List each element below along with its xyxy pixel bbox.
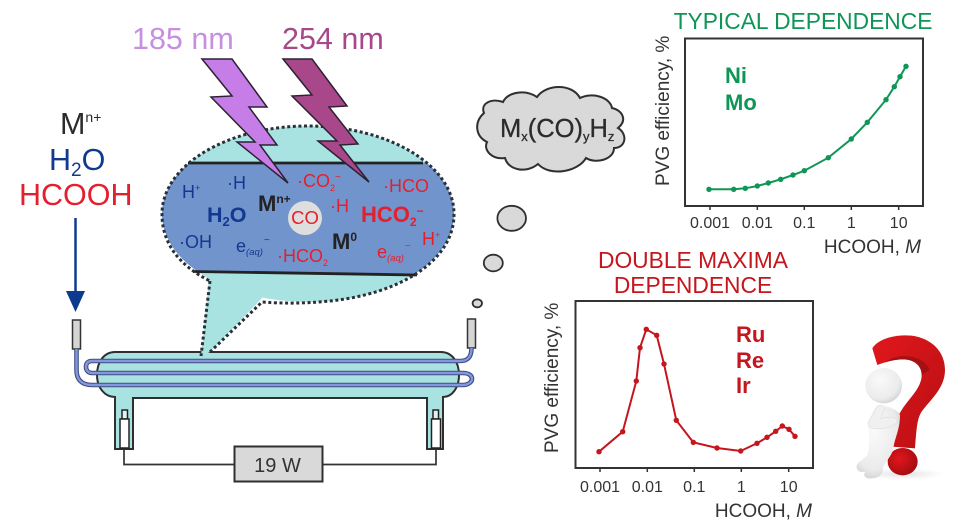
lamp reactor: [72, 319, 476, 482]
metal species: M: [258, 191, 276, 216]
lightning bolt 254 nm: [282, 22, 384, 182]
blue species: +: [195, 183, 200, 193]
red species: (aq): [387, 253, 404, 264]
shadow: [862, 468, 945, 480]
dotted outline: [162, 126, 454, 356]
chart: double maxima dependence: Ru: [736, 322, 765, 347]
reagent labels: HCOOH: [19, 178, 133, 212]
chart: typical dependence: HCOOH, M: [824, 237, 921, 258]
lightning bolt 185 nm: [132, 22, 288, 183]
red species: 2: [410, 215, 417, 229]
red species: 2: [323, 258, 328, 268]
reagent labels: M: [60, 107, 85, 141]
CO circle: [288, 201, 322, 235]
arm: [868, 405, 897, 429]
lightning bolt 185 nm: 185 nm: [132, 22, 234, 56]
question mark dot: [888, 448, 918, 475]
left electrode: [120, 410, 129, 448]
chart: double maxima dependence: PVG efficiency, %: [542, 303, 563, 453]
reagent labels: O: [82, 143, 105, 177]
question mark: [872, 335, 945, 448]
red species: −: [335, 172, 341, 183]
blue species: −: [264, 235, 270, 246]
chart: double maxima dependence: 1: [737, 479, 746, 496]
lamp body: [97, 352, 459, 449]
arrow: sample flow into reactor: [66, 218, 85, 312]
thought bubble large: [497, 206, 526, 231]
red species: −: [417, 204, 424, 218]
chart: typical dependence: Mo: [725, 90, 757, 115]
blue species: O: [230, 203, 246, 227]
chart: typical dependence: [653, 8, 932, 258]
blue species: e: [236, 236, 246, 256]
red species: ·CO: [297, 171, 330, 191]
thought bubble medium: [484, 255, 503, 271]
figure: [857, 406, 900, 478]
chart: typical dependence: TYPICAL DEPENDENCE: [674, 8, 932, 34]
power supply 19 W: 19 W: [254, 455, 301, 477]
thought cloud: y: [583, 129, 590, 144]
thought bubble small: [473, 299, 482, 307]
red species: ·HCO: [383, 176, 429, 196]
chart: double maxima dependence: 0.1: [683, 479, 706, 496]
blue species: H: [207, 203, 223, 227]
chart: double maxima dependence: HCOOH, M: [715, 501, 812, 522]
blue species: H: [182, 182, 195, 202]
callout bubble: [162, 126, 454, 356]
metal species: [258, 191, 357, 254]
right electrode: [432, 410, 440, 448]
chart: typical dependence: 1: [847, 215, 856, 232]
chart: double maxima dependence: 10: [780, 479, 798, 496]
blue species: ·OH: [179, 232, 212, 252]
red species: [277, 171, 440, 268]
red species: e: [377, 242, 387, 262]
chart: double maxima dependence: [542, 247, 813, 522]
chart: typical dependence: PVG efficiency, %: [653, 36, 674, 186]
reagent labels: H: [49, 143, 71, 177]
CO circle: CO: [291, 207, 319, 228]
red species: ·H: [330, 196, 349, 216]
chart: double maxima dependence: DOUBLE MAXIMA: [598, 247, 789, 273]
metal species: 0: [350, 230, 357, 244]
power supply 19 W: [234, 446, 322, 482]
red species: 2: [330, 183, 335, 193]
solution band: [150, 163, 470, 276]
red species: +: [435, 230, 440, 240]
chart: typical dependence: 10: [890, 215, 908, 232]
thought cloud: (CO): [528, 115, 583, 143]
chart: double maxima dependence: DEPENDENCE: [614, 272, 772, 298]
thought cloud: x: [521, 129, 528, 144]
blue species: [179, 173, 270, 258]
coil tube: [76, 348, 472, 385]
wiring: [124, 449, 436, 464]
chart: typical dependence: 0.001: [690, 215, 730, 232]
connector right: [468, 319, 476, 348]
red species: −: [405, 241, 411, 252]
reagent labels: n+: [85, 109, 101, 125]
head: [865, 368, 902, 403]
reagent labels: 2: [71, 160, 82, 181]
blue species: 2: [223, 214, 230, 229]
magnified reactor callout: [150, 126, 470, 356]
thought cloud: H: [589, 115, 608, 143]
blue species: ·H: [227, 173, 246, 193]
thought cloud: z: [608, 129, 614, 144]
icon: thinking figure with question mark: [857, 335, 945, 480]
thought cloud: M: [500, 115, 521, 143]
red species: ·HCO: [277, 246, 323, 266]
chart: double maxima dependence: 0.001: [580, 479, 620, 496]
chart: double maxima dependence: Ir: [736, 373, 751, 398]
red species: H: [422, 229, 435, 249]
lightning bolt 254 nm: 254 nm: [282, 22, 384, 56]
chart: typical dependence: Ni: [725, 63, 747, 88]
chart: double maxima dependence: 0.01: [632, 479, 663, 496]
metal species: n+: [276, 192, 291, 206]
connector left: [72, 320, 80, 349]
chart: typical dependence: 0.1: [793, 215, 816, 232]
chart: double maxima dependence: Re: [736, 348, 764, 373]
metal species: M: [332, 229, 350, 254]
reagent labels: [19, 107, 133, 212]
thought cloud: [477, 87, 624, 172]
red species: HCO: [361, 202, 410, 227]
chart: typical dependence: 0.01: [742, 215, 773, 232]
blue species: (aq): [246, 247, 263, 258]
